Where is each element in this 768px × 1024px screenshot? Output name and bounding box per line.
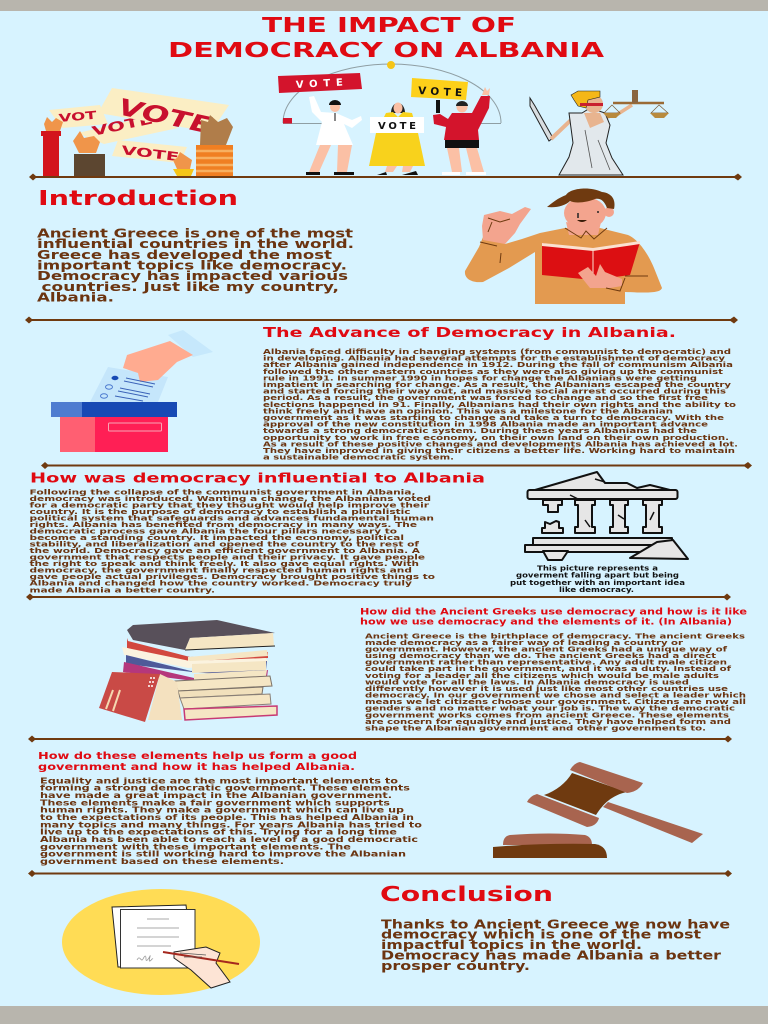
text block: ancient greeks: democracy. In our government we chose and select a leader which: [365, 690, 746, 700]
divider: [26, 594, 731, 600]
text block: introduction: [37, 226, 354, 305]
text block: advance of democracy: think freely and have an opinion. This was a milestone for the Albanian: [263, 406, 673, 415]
panel: introduction: [37, 186, 662, 305]
illustration: hands holding vote placards: VOTE: [116, 94, 214, 140]
text block: how was democracy influential: for a democratic party that they thought would help improve their: [30, 500, 430, 509]
illustration: hands holding vote placards: VOTE: [91, 112, 154, 140]
text block: ancient greeks: government. However, the ancient Greeks had a unique way of: [365, 644, 728, 654]
caption: temple picture: goverment falling apart but being: [516, 571, 679, 580]
text block: how was democracy influential: Albania and changed how the country worked. Democracy truly: [30, 579, 412, 588]
text block: ancient greeks: would vote for all the laws. In Albania democracy is used: [365, 677, 689, 686]
caption: temple picture: like democracy.: [559, 585, 634, 594]
text block: how was democracy influential: made Albania a better country.: [30, 585, 215, 594]
panel: ancient greeks and democracy: [99, 608, 747, 732]
heading: ancient greeks: [360, 608, 747, 627]
text block: how was democracy influential: democracy was introduced. Wanting a change, the Albanians voted: [30, 494, 431, 503]
text block: ancient greeks: could take part in the government, and it was a duty. Instead of: [365, 664, 732, 673]
text block: advance of democracy: opportunity to work in free economy, on their own land on their own production.: [263, 433, 729, 442]
text block: advance of democracy: in developing. Albania had several attempts for the establishment of democracy: [263, 354, 725, 363]
text block: introduction: countries. Just like my country,: [42, 280, 339, 294]
divider: [25, 316, 738, 324]
text block: advance of democracy: rule in 1991. In summer 1990 in hopes for change the Albanians were getting: [263, 373, 697, 382]
text block: introduction: Albania.: [37, 291, 114, 305]
text block: advance of democracy: approval of the new constitution in 1998 Albania made an important advance: [263, 420, 708, 429]
text block: advance of democracy: a sustainable democratic system.: [263, 453, 454, 462]
text block: how elements help: many topics and many things. For years Albania has tried to: [40, 820, 423, 829]
heading: how elements help: government and how it has helped Albania.: [38, 762, 355, 773]
illustration: broken greek temple: [525, 472, 688, 560]
text block: advance of democracy: towards a strong democratic system. During these years Albanians had the: [263, 426, 697, 435]
illustration: lady justice: [530, 90, 669, 175]
text block: how was democracy influential: democracy, the government finally respected human rights and: [30, 566, 412, 575]
text block: how elements help: [40, 776, 423, 866]
illustration: three people with vote signs: [278, 61, 501, 175]
illustration: hands holding vote placards: VOTE: [121, 143, 180, 164]
illustration: gavel: [493, 762, 703, 858]
text block: conclusion: democracy which is one of the most: [381, 928, 701, 942]
text block: how was democracy influential: democratic process gave Albania the four pillars necessary to: [30, 526, 397, 536]
heading: ancient greeks: How did the Ancient Greeks use democracy and how is it like: [360, 608, 747, 618]
text block: how was democracy influential: political system that safeguards and advances fundamental human: [30, 513, 434, 522]
text block: advance of democracy: and started forcing their way out, and massive social arrest occurred during this: [263, 387, 726, 396]
text block: ancient greeks: [365, 631, 746, 732]
text block: how elements help: These elements make a fair government which supports: [40, 798, 390, 807]
panel: conclusion: [62, 882, 730, 995]
caption: temple picture: This picture represents a: [537, 563, 658, 572]
illustration: three people with vote signs: VOTE: [418, 85, 462, 99]
text block: introduction: Ancient Greece is one of the most: [37, 226, 353, 240]
text block: how was democracy influential: become a standing country. It impacted the economy, political: [30, 533, 404, 542]
divider: [41, 462, 752, 469]
title: DEMOCRACY ON ALBANIA: [168, 38, 605, 62]
text block: advance of democracy: elections happened in 91. Finally, Albanians had their own rights and the ability to: [263, 400, 736, 409]
text block: advance of democracy: They have improved in giving their citizens a better life. Working hard to maintain: [263, 446, 735, 455]
text block: introduction: important topics like democracy.: [37, 258, 347, 272]
illustration: hands holding vote placards: VOT: [58, 109, 98, 125]
divider: [29, 174, 742, 180]
text block: ancient greeks: using democracy than we do. The ancient Greeks had a direct: [365, 651, 717, 660]
text block: how was democracy influential: Following the collapse of the communist government in Albania,: [30, 487, 416, 496]
text block: how elements help: human rights. They make a government which can live up: [40, 806, 404, 815]
text block: advance of democracy: followed the other eastern countries as they were also giving up the communist: [263, 367, 724, 376]
text block: how was democracy influential: government that respects people and their privacy. It gave people: [30, 553, 425, 562]
text block: ancient greeks: differently however it is used just like most other countries use: [365, 684, 728, 693]
text block: advance of democracy: period. As a result, the government was forced to change and so the first free: [263, 393, 708, 402]
text block: introduction: influential countries in the world.: [37, 237, 354, 251]
text block: ancient greeks: made democracy as a fairer way of leading a country or: [365, 638, 684, 647]
text block: ancient greeks: are concern for equality and justice. They have helped form and: [365, 717, 731, 726]
text block: ancient greeks: means we let citizens choose our government. Citizens are now all: [365, 697, 746, 706]
text block: how elements help: to the expectations of its people. This has helped Albania in: [40, 813, 414, 822]
text block: how was democracy influential: the right to speak and think freely. It also gave equal rights. With: [30, 559, 419, 568]
heading: how was democracy influential: How was democracy influential to Albania: [30, 472, 485, 487]
text block: how was democracy influential: rights. Albania has benefited from democracy in many ways. The: [30, 520, 417, 529]
text block: how elements help: live up to the expectations of this. Trying for a long time: [40, 828, 398, 837]
text block: advance of democracy: government as it was starting to change and take a turn to democracy. With the: [263, 413, 724, 422]
text block: how was democracy influential: the world. Democracy gave an efficient government to Albania. A: [30, 546, 421, 555]
text block: advance of democracy: Albania faced difficulty in changing systems (from communist to democratic) and: [263, 347, 731, 356]
illustration: hands holding vote placards: [41, 88, 233, 177]
text block: how elements help: government with these important elements. The: [40, 842, 352, 851]
text block: advance of democracy: impatient in searching for change. As a result, the Albanians escaped the country: [263, 380, 731, 389]
text block: conclusion: Democracy has made Albania a better: [381, 948, 721, 962]
text block: advance of democracy: after Albania gained independence in 1912. During the fall of communism Albania: [263, 360, 733, 369]
text block: how elements help: Albania has been able to reach a level of a good democratic: [40, 835, 418, 844]
text block: ancient greeks: Ancient Greece is the birthplace of democracy. The ancient Greeks: [365, 631, 745, 640]
illustration: hand placing ballot in box: [51, 330, 213, 452]
text block: how was democracy influential: stability, and liberalization and opened the country to the rest of: [30, 540, 420, 548]
text block: how was democracy influential: gave people actual privileges. Democracy brought positive things to: [30, 572, 435, 581]
heading: how elements help: How do these elements help us form a good: [38, 751, 357, 762]
illustration: three people with vote signs: VOTE: [378, 121, 416, 132]
divider: [28, 736, 732, 742]
text block: introduction: Greece has developed the most: [37, 248, 332, 262]
text block: advance of democracy: [263, 347, 738, 462]
text block: how was democracy influential: country. It is the purpose of democracy to establish a pluralistic: [30, 507, 410, 516]
divider: [28, 870, 732, 877]
title: THE IMPACT OF: [262, 13, 516, 37]
text block: how elements help: Equality and justice are the most important elements to: [40, 776, 399, 785]
caption: temple picture: put together with an important idea: [510, 578, 685, 587]
illustration: man reading a book: [465, 188, 662, 304]
text block: ancient greeks: voting for a leader all the citizens which would be male adults: [365, 671, 719, 680]
text block: introduction: Democracy has impacted various: [37, 269, 348, 283]
illustration: stack of books: [99, 620, 277, 722]
heading: introduction: Introduction: [38, 186, 238, 210]
text block: ancient greeks: shape the Albanian government and other governments to.: [365, 723, 706, 732]
illustration: three people with vote signs: VOTE: [296, 78, 343, 91]
text block: how elements help: government is still working hard to improve the Albanian: [40, 850, 406, 859]
text block: how elements help: government based on these elements.: [40, 857, 284, 866]
text block: how elements help: have made a great impact in the Albanian government.: [40, 791, 392, 800]
text block: ancient greeks: government rather than representative. Any adult male citizen: [365, 658, 727, 667]
text block: advance of democracy: As a result of these positive changes and developments Albania has achieved a lot.: [263, 439, 738, 448]
caption: temple picture: [510, 563, 685, 594]
text block: conclusion: prosper country.: [381, 959, 530, 973]
text block: how was democracy influential: [30, 487, 435, 594]
panel: how was democracy influential: [30, 472, 688, 594]
heading: how elements help: [38, 751, 357, 773]
panel: how elements help: [38, 751, 703, 866]
heading: conclusion: Conclusion: [380, 882, 553, 906]
illustration: hand signing document: [62, 889, 260, 995]
text block: how elements help: forming a strong democratic government. These elements: [40, 784, 410, 793]
text block: conclusion: [381, 917, 730, 973]
panel: the advance of democracy: [51, 325, 738, 462]
heading: ancient greeks: how we use democracy and the elements of it. (In Albania): [360, 617, 732, 627]
text block: conclusion: Thanks to Ancient Greece we now have: [381, 917, 730, 931]
text block: ancient greeks: government works comes from ancient Greece. These elements: [365, 710, 729, 719]
heading: advance of democracy: The Advance of Democracy in Albania.: [263, 325, 676, 341]
text block: ancient greeks: genders and no matter what your job is. The way the democratic: [365, 704, 735, 713]
title: [168, 13, 605, 62]
text block: conclusion: impactful topics in the world.: [381, 938, 642, 952]
